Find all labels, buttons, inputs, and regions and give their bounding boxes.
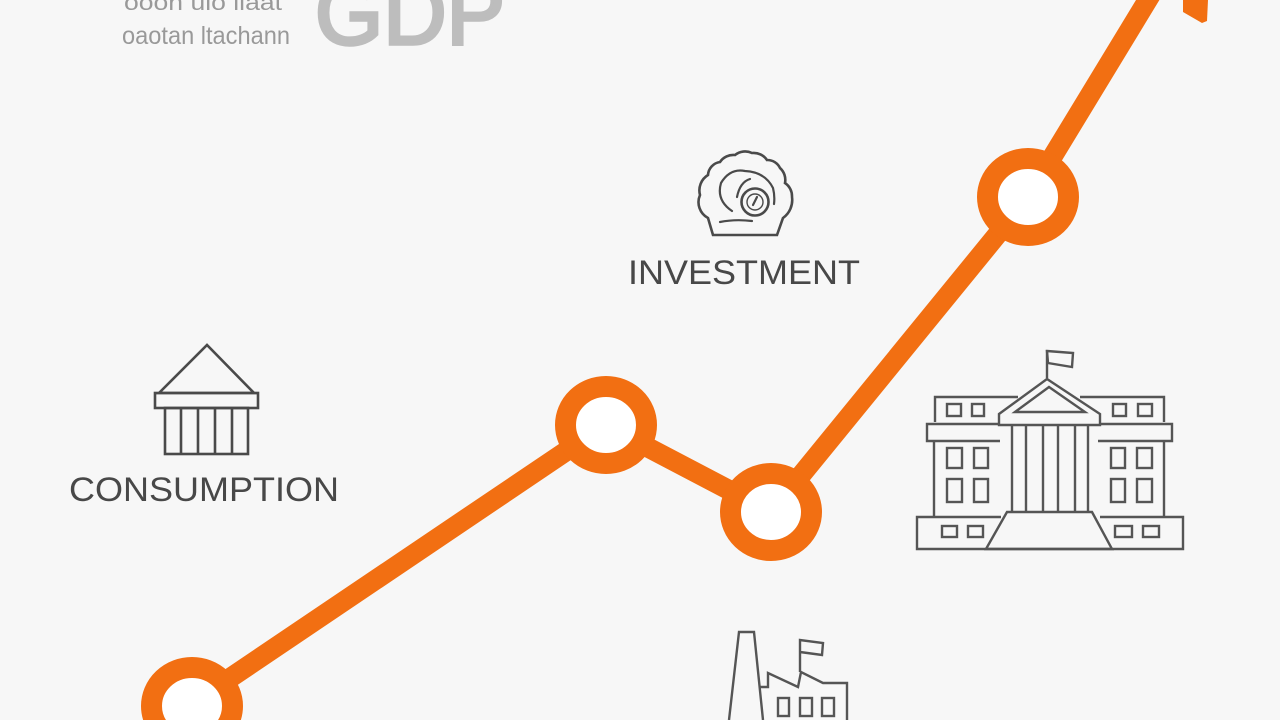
icon: investment coin in cloud: [699, 151, 792, 235]
label: investment: INVESTMENT: [628, 254, 860, 292]
marker four: [988, 158, 1068, 236]
icon: consumption temple: [155, 345, 258, 454]
icon: factory: [729, 632, 847, 720]
heading: GDP title block: [122, 0, 505, 64]
marker one: [152, 668, 232, 720]
marker three: [730, 474, 812, 550]
growth line: [190, 0, 1155, 705]
subtitle text line two: oaotan ltachann: [122, 22, 290, 50]
icon: government building: [917, 350, 1183, 549]
label: consumption: CONSUMPTION: [69, 471, 339, 509]
marker two: [566, 386, 646, 464]
arrow head fragment: [1183, 0, 1208, 23]
